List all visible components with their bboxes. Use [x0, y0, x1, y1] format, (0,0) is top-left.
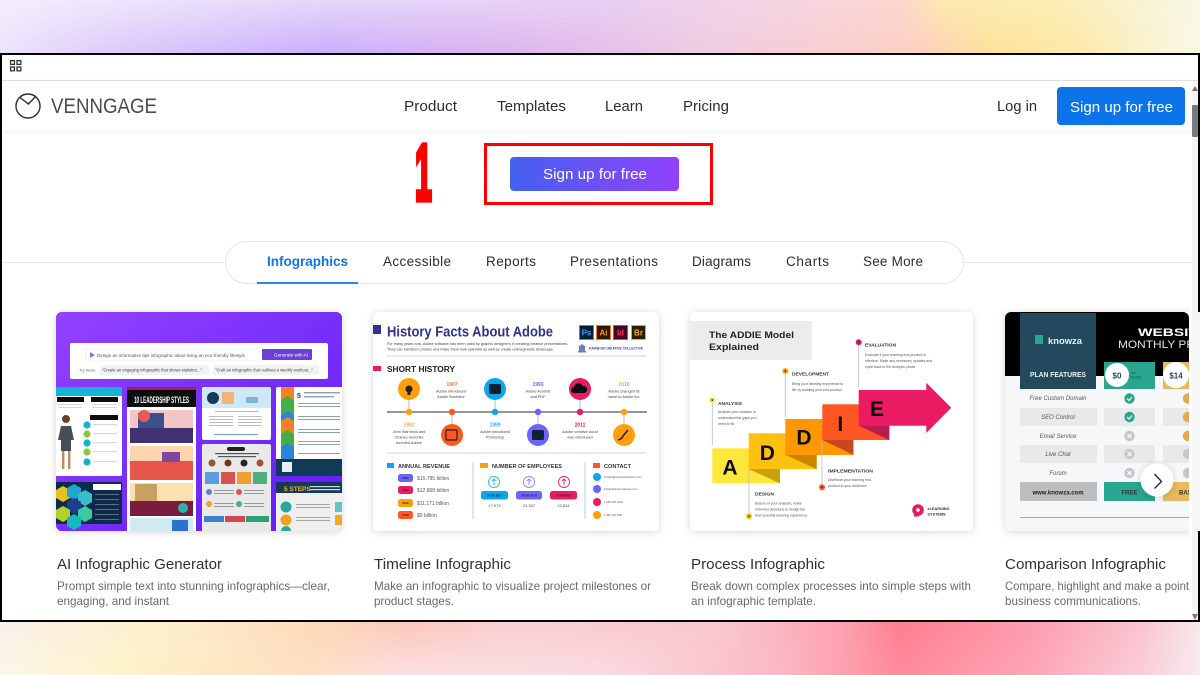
caption: process infographic: an infographic template.	[691, 594, 816, 608]
milestone labels: Photoshop	[486, 436, 504, 440]
heading: Short history: SHORT HISTORY	[387, 365, 456, 374]
thumbnail: remote work	[202, 387, 271, 440]
step: evaluation: cycle back to the Analysis phase.	[865, 365, 916, 369]
milestone labels: name to Adobe Inc.	[608, 395, 640, 399]
panel: number of employees: YEAR 2017	[487, 494, 503, 498]
pricing columns: $14	[1169, 372, 1183, 380]
logo: Rainbow Creative Collective	[578, 344, 643, 352]
step: analysis: Analyze your situation to	[718, 410, 756, 414]
milestone labels: and PDF	[531, 395, 546, 399]
footer row: BASIC	[1179, 490, 1198, 496]
icons: Adobe apps: Br	[634, 328, 643, 338]
menu links	[404, 98, 1037, 115]
milestone labels: 2011	[575, 422, 586, 428]
category tabs: Diagrams	[692, 254, 751, 269]
staircase arrow diagram	[712, 383, 951, 483]
thumbnail: 5 steps	[276, 482, 342, 531]
feature rows: SEO Control	[1041, 415, 1076, 421]
caption: process infographic: Break down complex processes into simple steps with	[691, 579, 971, 593]
panel: annual revenue: 2019	[402, 501, 409, 505]
logo: eLearning Systems	[912, 504, 949, 516]
caption: comparison infographic	[1005, 556, 1190, 608]
logo: eLearning Systems: SYSTEMS	[928, 512, 946, 516]
prompt panel: "Craft an infographic that outlines a weekly workout..."	[215, 368, 313, 372]
milestone labels: 1993	[532, 382, 544, 388]
timeline chart	[387, 378, 647, 446]
panel: annual revenue: $12.868 billion	[417, 488, 449, 494]
panel: plan features	[1020, 313, 1096, 389]
prompt panel: Try these	[79, 368, 96, 372]
panel: annual revenue: $11.171 billion	[417, 501, 449, 507]
button: carousel next	[1140, 464, 1174, 496]
panel: annual revenue: 2018	[402, 513, 409, 517]
step: design: informed decisions to design the	[755, 508, 805, 512]
step: evaluation: Evaluate if your learning end-product is	[865, 353, 926, 357]
panel: annual revenue: $9 billion	[417, 513, 437, 519]
pricing columns	[1104, 362, 1189, 389]
heading: History Facts About Adobe	[373, 324, 568, 352]
logo: Venngage: VENNGAGE	[51, 95, 157, 118]
prompt panel: Generate with AI	[274, 352, 308, 358]
button: sign up (nav)	[1057, 87, 1185, 125]
milestone labels: Adobe changed its	[608, 390, 640, 394]
caption: AI infographic generator: engaging, and instant	[57, 594, 170, 608]
milestone labels: 1982	[403, 422, 415, 428]
milestone labels: founded Adobe	[396, 441, 422, 445]
step: development: Bring your learning experience to	[792, 382, 843, 386]
milestone labels: Adobe Acrobat	[526, 390, 551, 394]
icon: app grid	[11, 61, 21, 71]
thumbnail: 5 steps: 5 STEPS	[284, 486, 311, 493]
menu links: Templates	[497, 98, 566, 115]
milestone labels: Charles Geschke	[394, 436, 424, 440]
caption: AI infographic generator: AI Infographic Generator	[57, 556, 222, 573]
panel: annual revenue: ANNUAL REVENUE	[398, 464, 450, 470]
card: comparison infographic	[1005, 312, 1200, 531]
menu links: Learn	[605, 98, 643, 115]
card: timeline infographic	[373, 312, 659, 531]
footer row: FREE	[1121, 490, 1138, 496]
caption: timeline infographic: Timeline Infographic	[374, 556, 512, 573]
category tabs: Reports	[486, 254, 536, 269]
icons: Adobe apps: Ai	[600, 328, 608, 338]
category tabs: Charts	[786, 254, 829, 269]
staircase arrow diagram: I	[837, 413, 843, 436]
milestone labels: 1989	[489, 422, 501, 428]
caption: timeline infographic: product stages.	[374, 594, 454, 608]
panel: contact	[593, 463, 642, 519]
step: design: DESIGN	[755, 492, 774, 496]
pricing columns: month	[1131, 376, 1141, 380]
button: sign up (hero): Sign up for free	[543, 166, 647, 183]
panel: number of employees: 21,357	[523, 503, 536, 508]
icons: milestone circles	[398, 378, 635, 446]
staircase arrow diagram: E	[870, 398, 884, 421]
heading: History Facts About Adobe: For many years now, Adobe software has been used by graphic designers in creating creative presentations.	[387, 342, 568, 346]
panel: contact: CONTACT	[604, 464, 632, 470]
thumbnail: environmental impacts: 5	[297, 393, 301, 400]
button: sign up (nav): Sign up for free	[1070, 99, 1173, 116]
caption: process infographic: Process Infographic	[691, 556, 825, 573]
panel: number of employees: 22,634	[557, 503, 570, 508]
heading: The ADDIE Model Explained	[690, 321, 812, 360]
step: development: life by building your end-product.	[792, 388, 843, 392]
milestone labels: Adobe creative cloud	[562, 430, 598, 434]
prompt panel	[70, 343, 328, 379]
footer row	[1020, 482, 1200, 518]
heading: History Facts About Adobe: History Facts About Adobe	[387, 324, 553, 340]
caption: comparison infographic: Compare, highlight and make a point	[1005, 579, 1190, 593]
category tabs: Presentations	[570, 254, 658, 269]
step: analysis: ANALYSIS	[718, 401, 742, 406]
footer row: www.knowza.com	[1031, 490, 1084, 496]
feature rows: Live Chat	[1045, 452, 1071, 458]
panel: contact: 1 555 509 1230	[604, 500, 623, 504]
thumbnail: leadership styles: 10 LEADERSHIP STYLES	[134, 395, 189, 405]
step: analysis: need to fill.	[718, 422, 735, 426]
card: process infographic	[690, 312, 973, 531]
milestone labels: was introduced	[567, 436, 593, 440]
category tabs: Infographics	[267, 254, 348, 269]
captions	[57, 556, 1190, 608]
panel: number of employees: YEAR 2018	[521, 494, 537, 498]
milestone labels	[393, 382, 640, 445]
panel: contact: info@rainbowcollective.com	[604, 487, 638, 491]
step: implementation: IMPLEMENTATION	[828, 468, 873, 474]
caption: timeline infographic: Make an infographic to visualize project milestones or	[374, 579, 651, 593]
step: analysis	[709, 397, 757, 426]
category tabs: See More	[863, 254, 923, 269]
heading: The ADDIE Model Explained: The ADDIE Model	[709, 330, 794, 341]
panel: contact: contact@rainbowcollective.com	[604, 475, 642, 479]
navigation bar	[2, 81, 1192, 131]
button: sign up (hero)	[510, 157, 679, 191]
step: evaluation	[856, 339, 932, 369]
menu links: Log in	[997, 98, 1037, 115]
category tabs	[226, 242, 964, 284]
milestone labels: 1907	[446, 382, 458, 388]
milestone labels: Adobe Illustrator	[437, 395, 466, 399]
staircase arrow diagram: D	[796, 426, 812, 450]
caption: process infographic	[691, 556, 971, 608]
milestone labels: Adobe introduced	[480, 430, 510, 434]
prompt panel: Design an informative tips infographic about living an eco-friendly lifestyle	[97, 353, 245, 358]
logo: eLearning Systems: eLEARNING	[928, 507, 949, 511]
prompt panel: "Create an engaging infographic that shows statistics..."	[102, 368, 202, 372]
step number 1: 1	[415, 127, 432, 217]
menu links: Product	[404, 98, 458, 115]
icons: Adobe apps: Id	[617, 328, 624, 338]
feature rows: Forum	[1049, 471, 1067, 477]
feature rows: Free Custom Domain	[1029, 396, 1087, 402]
thumbnail: hexagon chart	[50, 482, 122, 530]
thumbnail: diverse hiring	[202, 444, 271, 536]
panel: plan features: knowza	[1048, 336, 1083, 346]
milestone labels: 2018	[618, 382, 630, 388]
feature rows	[1020, 393, 1200, 478]
caption: comparison infographic: business communications.	[1005, 594, 1141, 608]
panel: number of employees: NUMBER OF EMPLOYEES	[492, 464, 562, 470]
step: development	[782, 368, 843, 392]
panel: number of employees: YEAR 2019	[556, 494, 572, 498]
step: evaluation: EVALUATION	[865, 342, 896, 348]
heading: website monthly pricing: WEBSITE	[1138, 327, 1200, 339]
heading: History Facts About Adobe: They can transform photos and make them look splendid as well as create unimaginable landscape.	[387, 348, 554, 352]
caption: timeline infographic	[374, 556, 651, 608]
step: implementation: product to your audience.	[828, 484, 868, 488]
heading: The ADDIE Model Explained: Explained	[709, 342, 759, 353]
step: evaluation: effective. Make any necessary updates and	[865, 359, 932, 363]
step: design	[746, 492, 808, 519]
staircase arrow diagram: A	[722, 456, 738, 480]
step: implementation	[819, 468, 873, 490]
panel: annual revenue: 2021	[402, 476, 409, 480]
feature rows: Email Service	[1040, 434, 1077, 440]
staircase arrow diagram: D	[760, 442, 775, 465]
panel: annual revenue: 2020	[402, 488, 409, 492]
caption: AI infographic generator: Prompt simple text into stunning infographics—clear,	[57, 579, 330, 593]
logo: Rainbow Creative Collective: RAINBOW CREATIVE COLLECTIVE	[589, 346, 643, 350]
caption: comparison infographic: Comparison Infographic	[1005, 556, 1166, 573]
step: development: DEVELOPMENT	[792, 372, 830, 376]
card: AI infographic generator	[50, 312, 346, 537]
step: design: best possible learning experience.	[755, 514, 808, 518]
heading: website monthly pricing	[1118, 328, 1189, 348]
thumbnail: leadership styles	[127, 387, 196, 537]
category tabs: Accessible	[383, 254, 451, 269]
logo: Venngage	[16, 94, 157, 118]
milestone labels: John Warnrock and	[393, 430, 425, 434]
thumbnail: environmental impacts	[276, 387, 346, 476]
menu links: Pricing	[683, 98, 729, 115]
panel: annual revenue: $15.785 billion	[417, 476, 449, 482]
caption: AI infographic generator	[57, 556, 330, 608]
callout: red highlight box	[486, 144, 712, 204]
scrollbar	[1192, 81, 1198, 620]
thumbnail: better manager	[50, 387, 122, 476]
step: implementation: Distribute your learning end-	[828, 478, 873, 482]
panel: plan features: PLAN FEATURES	[1030, 372, 1086, 379]
pricing columns: per	[1131, 371, 1137, 375]
icons: Adobe apps: Ps	[582, 328, 592, 338]
step: analysis: understand the gaps you	[718, 416, 757, 420]
panel: contact: 1 555 123 4567	[604, 513, 623, 517]
milestone labels: Adobe introduced	[436, 390, 466, 394]
pricing columns: $0	[1113, 372, 1122, 380]
panel: annual revenue	[387, 463, 450, 519]
icons: Adobe apps	[580, 326, 646, 340]
panel: number of employees	[480, 463, 577, 508]
panel: number of employees: 17,973	[488, 503, 501, 508]
step: design: Based on your analysis, make	[755, 502, 802, 506]
